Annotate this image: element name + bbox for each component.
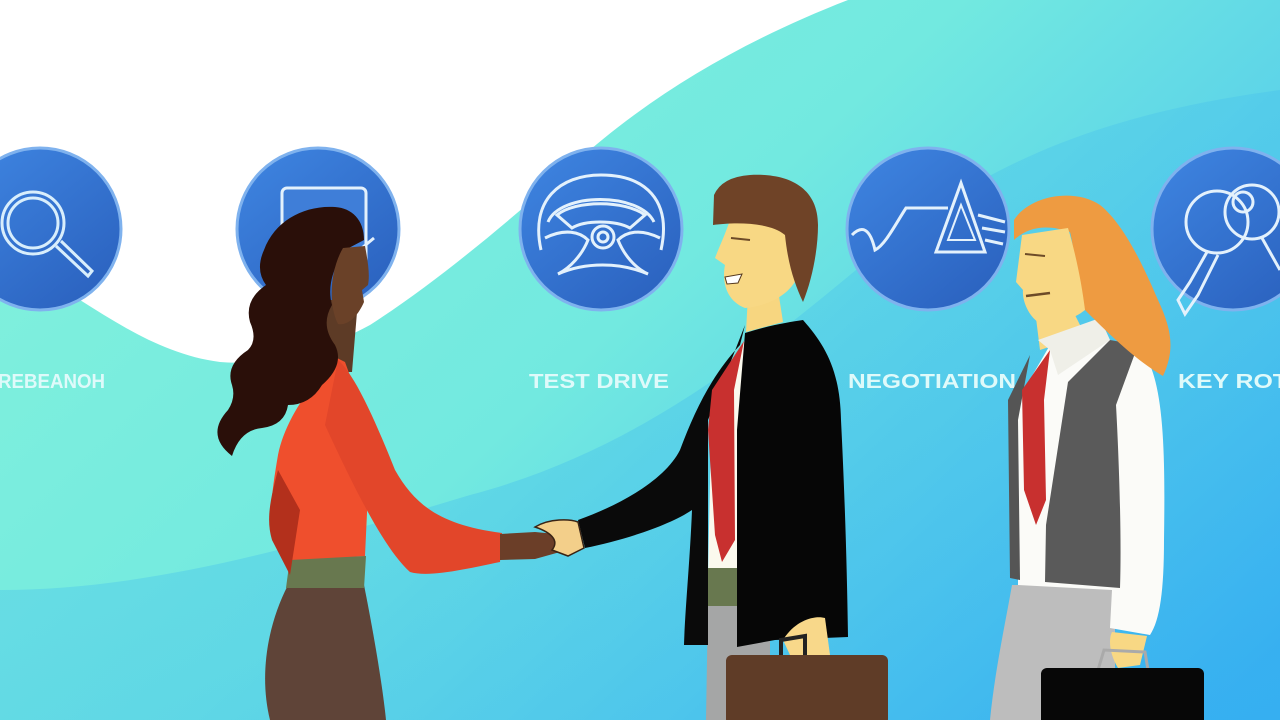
face [332, 246, 369, 324]
neck [1035, 305, 1085, 350]
briefcase handle [1098, 650, 1148, 670]
mouth [725, 274, 742, 284]
shirt [708, 340, 745, 575]
tie [708, 341, 744, 562]
icon: keys [1152, 148, 1280, 314]
eye [731, 238, 750, 240]
shirt [1018, 340, 1164, 635]
icon: research magnifier [0, 148, 121, 310]
jacket left front and arm [578, 325, 745, 645]
collar [1038, 318, 1110, 375]
neck [318, 300, 358, 372]
skirt [990, 585, 1115, 720]
trousers [706, 600, 770, 720]
jacket [737, 320, 848, 647]
belt [286, 556, 366, 588]
vest [1045, 340, 1138, 588]
face [715, 215, 800, 308]
icon: document [237, 148, 399, 310]
label: test drive: TEST DRIVE [529, 371, 669, 393]
hair [713, 175, 818, 302]
figure: woman colleague [990, 196, 1204, 720]
label: research: REBEANOH [0, 371, 105, 393]
hair [217, 207, 364, 456]
icon: steering wheel [520, 148, 682, 310]
label: negotiation: NEGOTIATION [848, 371, 1016, 393]
white wave [0, 0, 848, 363]
hand on briefcase [783, 617, 830, 655]
torso [271, 358, 395, 560]
label: key rotation: KEY ROT [1178, 371, 1280, 393]
mouth [1026, 293, 1050, 296]
hair [1014, 196, 1170, 376]
briefcase handle [781, 636, 805, 657]
waist [708, 568, 737, 606]
figure: salesman [535, 175, 888, 720]
figure: woman customer [217, 207, 566, 720]
arm [325, 360, 502, 574]
neck [746, 290, 783, 332]
hand shake [535, 520, 584, 556]
eye [1025, 254, 1045, 256]
briefcase [1041, 668, 1204, 720]
shaded side [269, 470, 300, 575]
vest left [1008, 355, 1030, 580]
icon: negotiation triangle [847, 148, 1009, 310]
skirt [265, 585, 386, 720]
briefcase [726, 655, 888, 720]
tie [1022, 350, 1050, 525]
hand [500, 532, 566, 560]
face [1016, 228, 1085, 323]
hand [1110, 632, 1147, 668]
